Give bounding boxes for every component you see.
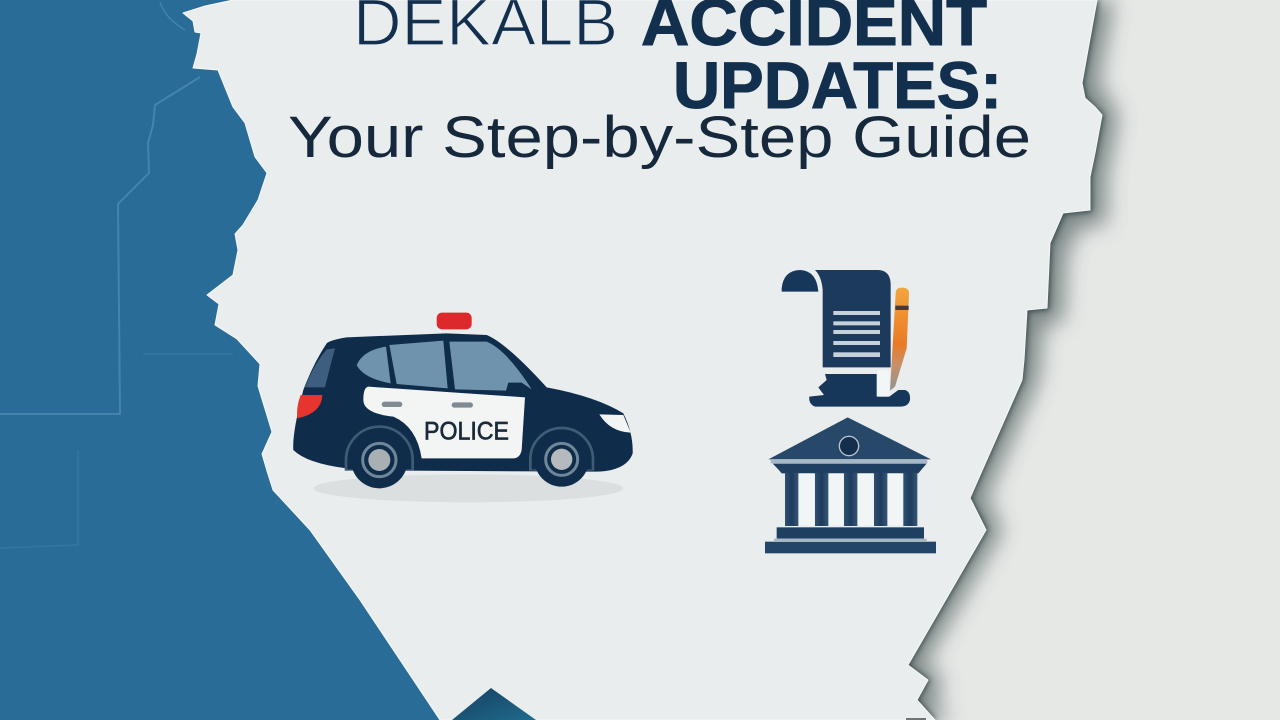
icon: courthouse: [765, 417, 936, 553]
tail light: [297, 395, 322, 418]
roof light: [437, 313, 472, 329]
entablature: [773, 464, 927, 473]
front wheel arch: [530, 428, 593, 471]
pen: [890, 288, 909, 391]
rear wheel: [351, 432, 408, 488]
police lettering: POLICE: [424, 417, 509, 445]
oculus: [839, 436, 859, 456]
cornice line: [771, 460, 927, 463]
icon: police car: [293, 313, 633, 502]
icon: scroll document and pen: [782, 270, 910, 407]
blue map region: [0, 0, 520, 720]
paper cast shadow: [400, 0, 1118, 720]
step highlight: [774, 539, 927, 541]
title: [288, 0, 1031, 170]
scroll base: [809, 374, 910, 407]
title word: UPDATES: UPDATES:: [673, 48, 1002, 122]
scroll curl: [782, 270, 818, 292]
columns: [785, 473, 917, 526]
map boundary lines: [0, 2, 233, 548]
rear quarter window: [305, 348, 335, 387]
rear wheel arch: [346, 427, 413, 471]
front wheel: [534, 432, 589, 487]
door handles: [382, 402, 473, 408]
scroll sheet: [815, 270, 891, 367]
paper fold: [877, 370, 889, 397]
white door panel: [363, 387, 525, 458]
subtitle: Your Step-by-Step Guide: [288, 105, 1031, 170]
car body: [293, 333, 633, 472]
white paper county shape: [183, 0, 1102, 720]
lower step: [765, 542, 936, 553]
side window rear: [357, 347, 391, 383]
car shadow: [313, 474, 623, 502]
upper step: [777, 527, 924, 539]
side window middle: [389, 341, 448, 388]
text lines: [833, 311, 880, 357]
column gaps: [799, 473, 903, 525]
small grey tab at the bottom edge: [906, 718, 926, 720]
dark blue triangle at the bottom edge: [452, 688, 536, 720]
headlight: [599, 414, 631, 433]
side window front: [449, 342, 532, 391]
pediment: [768, 417, 931, 459]
